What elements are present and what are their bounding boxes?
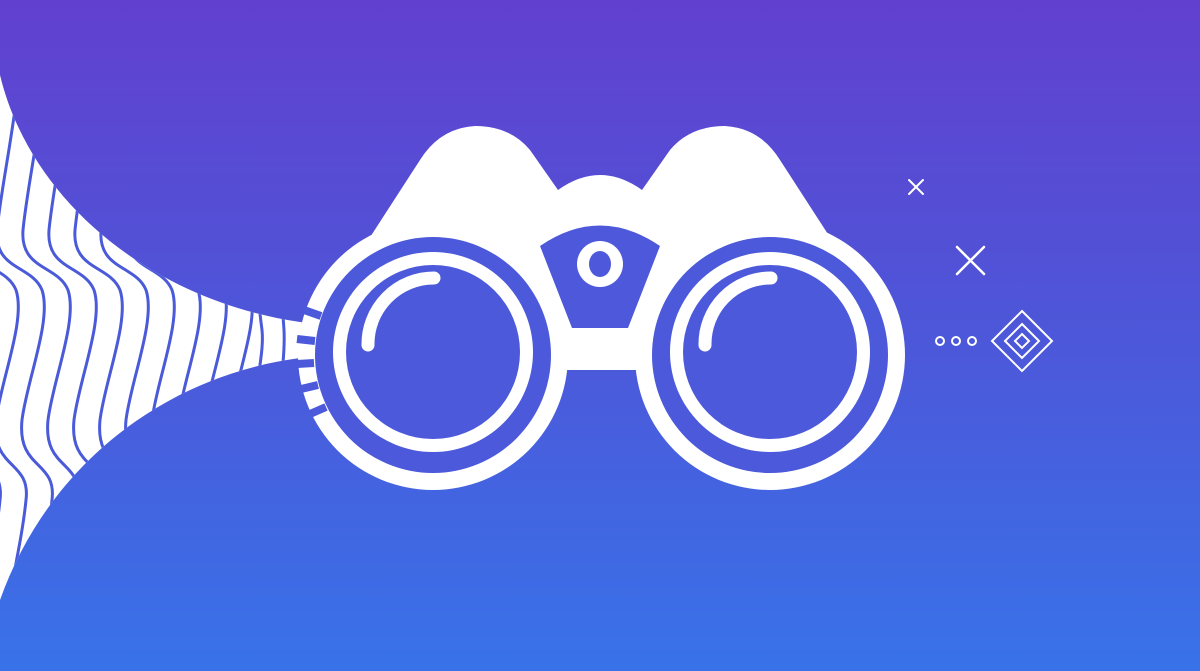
right lens [652,237,888,473]
decoration: three dots [936,337,976,345]
decoration: nested diamond [992,311,1052,371]
decoration: large cross [957,247,984,274]
icon: binoculars [297,126,905,490]
decoration: small cross [909,180,923,194]
knurl dashes [297,310,326,414]
focus wheel [577,241,623,287]
bridge bar [433,326,770,370]
right body [635,220,905,490]
white wave region with striped lines [0,75,302,600]
left body [298,220,568,490]
bridge blue cavity [540,226,660,328]
binoculars top prisms [310,126,890,330]
left lens [315,237,551,473]
